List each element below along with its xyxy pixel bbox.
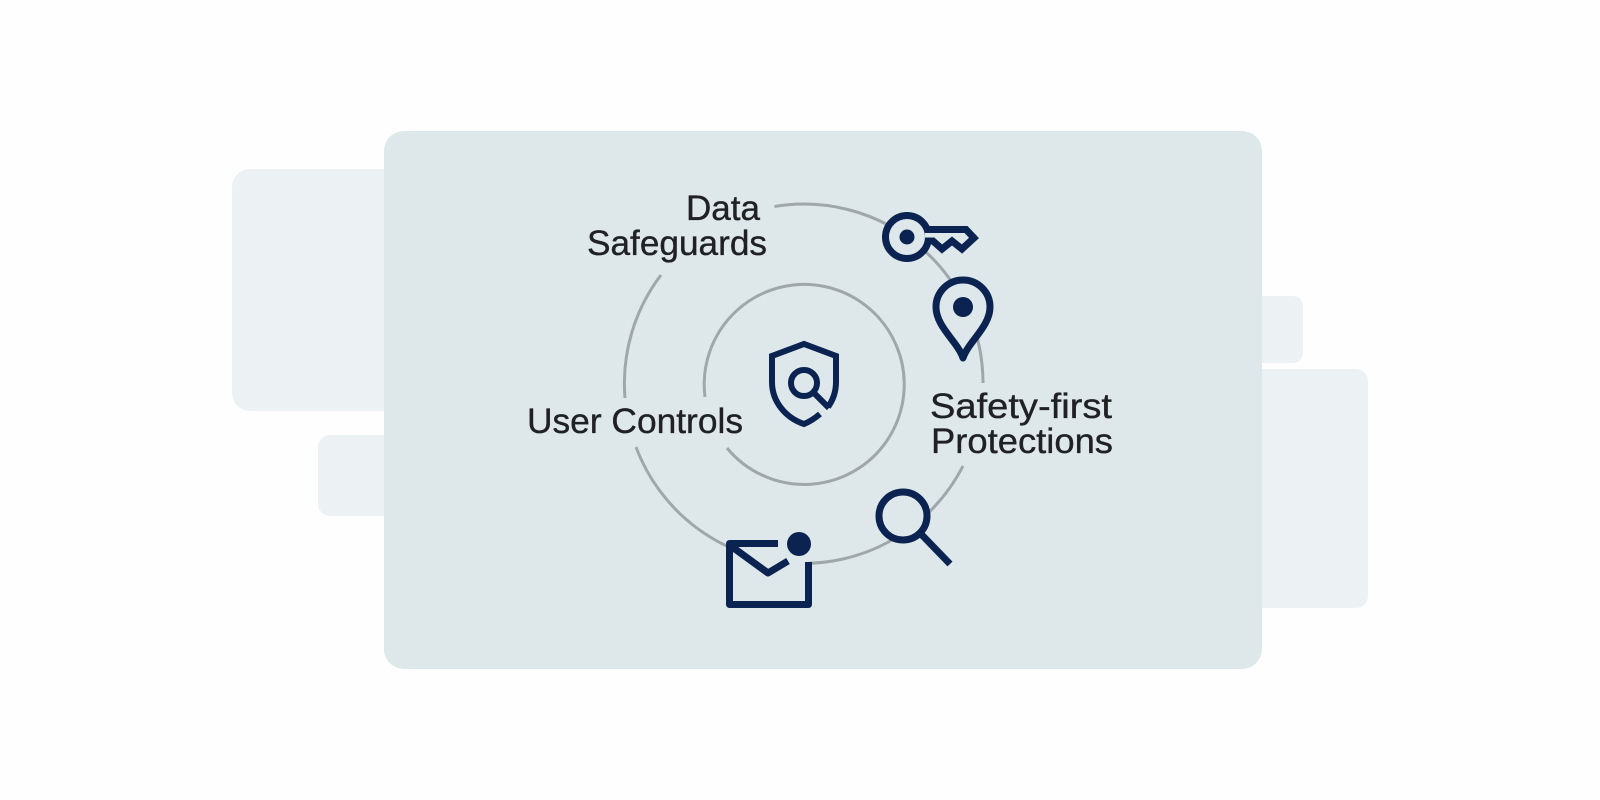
label: Data Safeguards — [587, 189, 767, 263]
label: User Controls: User Controls — [527, 402, 743, 441]
background panel: lower left — [318, 435, 418, 516]
icon: key — [886, 216, 974, 258]
icon: mail with notification dot — [729, 532, 811, 605]
label: Safety-first Protections: Protections — [931, 422, 1113, 461]
background panel: upper right — [1220, 296, 1303, 363]
background panel: upper left — [232, 169, 432, 411]
icon: shield with magnifier — [772, 344, 836, 424]
main panel — [384, 131, 1262, 669]
background panel: lower right — [1220, 369, 1368, 608]
inner ring — [704, 284, 904, 484]
label: Data Safeguards: Data — [686, 189, 761, 228]
label: Safety-first Protections: Safety-first — [930, 387, 1112, 426]
icon: location pin — [936, 280, 990, 358]
label: Data Safeguards: Safeguards — [587, 224, 767, 263]
label: Safety-first Protections — [930, 387, 1113, 461]
outer ring — [624, 204, 983, 563]
icon: magnifier — [879, 492, 950, 564]
